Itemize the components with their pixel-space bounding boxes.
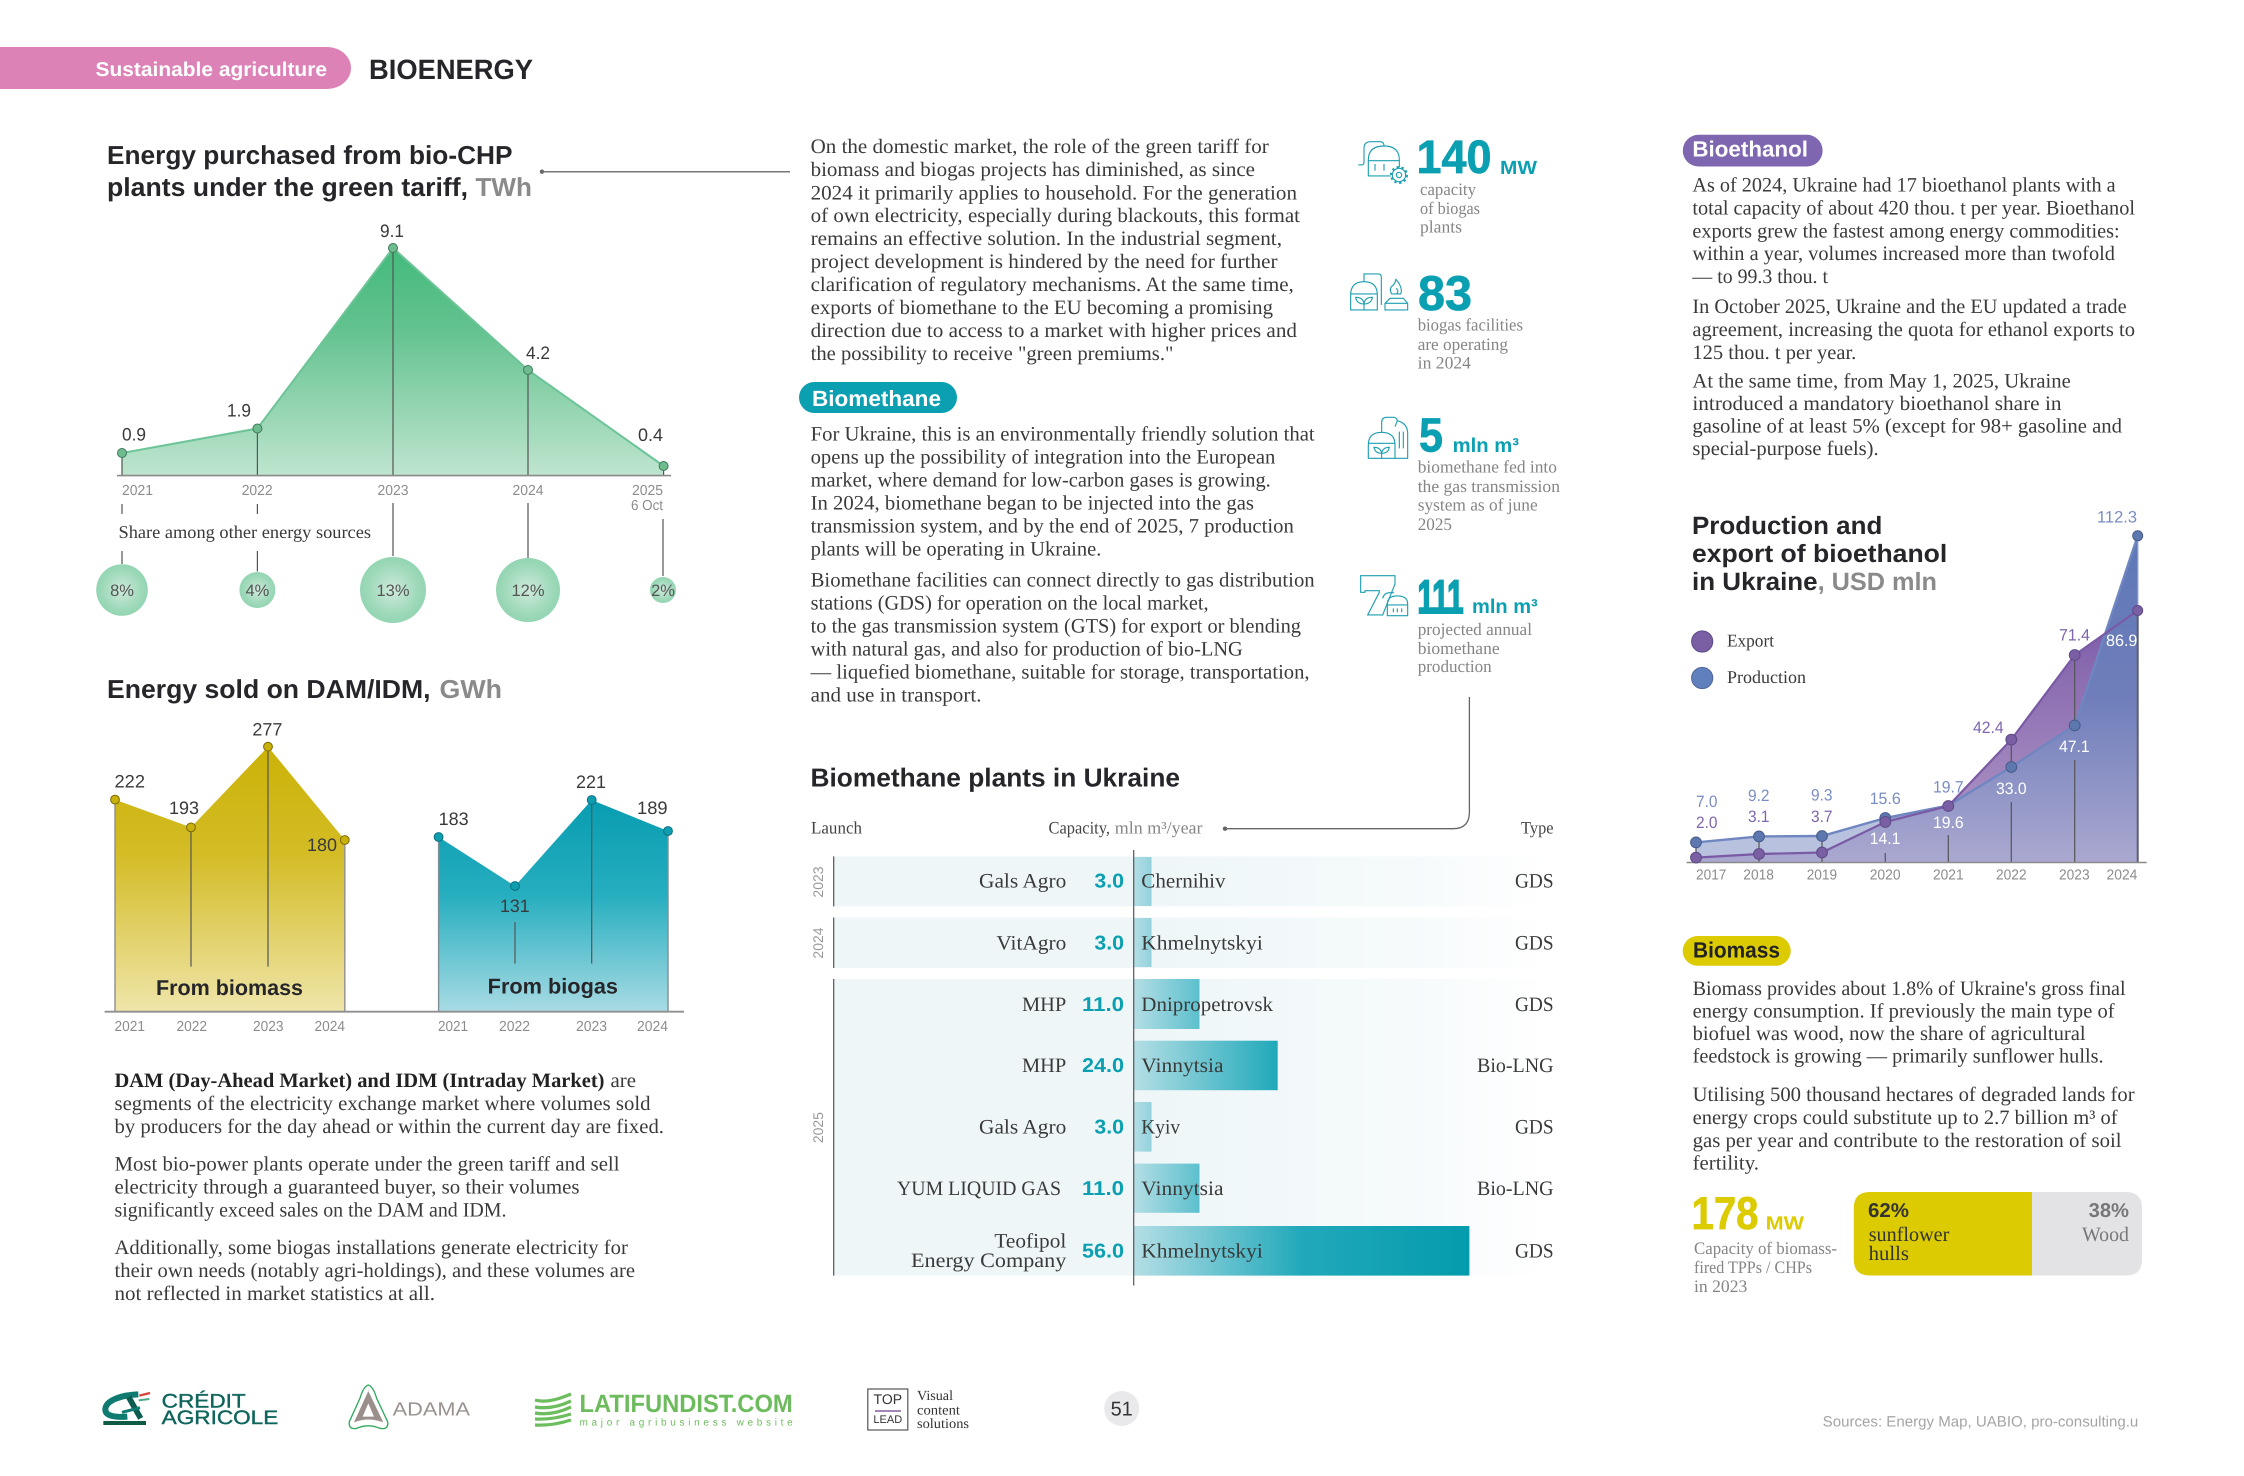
area chart: from biogas: 2022 (499, 1019, 530, 1035)
row: Gals Agro 3.0 Chernihiv: Chernihiv (1141, 871, 1226, 893)
header: section tab: Sustainable agriculture (96, 59, 327, 81)
row: Teofipol Energy Company 56.0 Khmelnytskyi: 56.0 (1082, 1240, 1124, 1262)
row: Gals Agro 3.0 Chernihiv: 3.0 (1094, 871, 1124, 893)
row: VitAgro 3.0 Khmelnytskyi: GDS (1515, 933, 1554, 955)
stat: 111 mln m3 projected production (1361, 570, 1538, 676)
text block: DAM and IDM explanation: their own needs (notably agri-holdings), and these volumes are (114, 1260, 635, 1282)
area chart: from biomass: 2023 (253, 1019, 284, 1035)
area chart: from biomass: 277 (252, 720, 282, 740)
table header: mln m³/year (1115, 818, 1203, 838)
panel: energy sold on DAM/IDM (105, 674, 684, 1035)
area chart: TWh by year: 0.9 (122, 425, 146, 445)
text block: biomethane: plants will be operating in Ukraine. (811, 538, 1101, 560)
text block: biomethane: Biomethane facilities can connect directly to gas distribution (811, 570, 1315, 592)
text block: bioethanol: introduced a mandatory bioethanol share in (1692, 393, 2062, 415)
text block: bioethanol: gasoline of at least 5% (except for 98+ gasoline and (1692, 416, 2122, 438)
row: MHP 24.0 Vinnytsia: MHP (1022, 1055, 1066, 1077)
row: Gals Agro 3.0 Kyiv: Kyiv (1141, 1116, 1181, 1138)
area chart: from biogas: From biogas (488, 974, 618, 998)
text block: bioethanol: At the same time, from May 1, 2025, Ukraine (1692, 370, 2071, 392)
text block: biomass (1693, 978, 2135, 1174)
stat: 111 mln m3 projected production: biomethane (1418, 638, 1500, 658)
area chart: TWh by year: 2023 (378, 483, 408, 499)
icon: tank and silo (1368, 417, 1408, 458)
header: section tab (0, 47, 351, 89)
area chart: TWh by year: 1.9 (227, 401, 251, 421)
area chart: from biomass: From biomass (156, 976, 303, 1000)
bubbles: share among other energy sources (96, 503, 676, 623)
logo: Top Lead: LEAD (873, 1414, 902, 1426)
area chart: TWh by year: 9.1 (380, 221, 404, 241)
area chart: from biogas: 2021 (438, 1019, 468, 1035)
text block: biomass: energy crops could substitute up to 2.7 billion m³ of (1693, 1107, 2118, 1129)
header: page title: BIOENERGY (369, 54, 533, 85)
page number: 51 (1111, 1398, 1133, 1420)
logo: Top Lead: TOP (874, 1391, 902, 1407)
page number (1104, 1391, 1139, 1426)
area chart: bioethanol: 42.4 (1973, 719, 2004, 737)
text block: DAM and IDM explanation: not reflected in market statistics at all. (114, 1283, 435, 1305)
text block: biomethane (810, 423, 1315, 707)
area chart: TWh by year: 2024 (512, 483, 544, 499)
launch year labels: 2023 (810, 866, 826, 898)
row: VitAgro 3.0 Khmelnytskyi: 3.0 (1094, 933, 1124, 955)
legend: Export (1727, 630, 1774, 650)
logo: Credit Agricole (103, 1391, 278, 1429)
row: YUM LIQUID GAS 11.0 Vinnytsia: Vinnytsia (1141, 1178, 1224, 1200)
stat: 83 biogas facilities: are operating (1418, 334, 1508, 354)
area chart: TWh by year: 2022 (242, 483, 273, 499)
stacked bar: sunflower hulls vs wood: 62% (1868, 1200, 1909, 1222)
stat: 140 MW capacity of biogas plants: 140 (1416, 130, 1492, 183)
area chart: bioethanol: 33.0 (1996, 780, 2027, 798)
row: MHP 24.0 Vinnytsia: Vinnytsia (1141, 1055, 1224, 1077)
area chart: bioethanol: 7.0 (1696, 793, 1718, 811)
row: YUM LIQUID GAS 11.0 Vinnytsia: Bio-LNG (1477, 1178, 1554, 1200)
area chart: TWh by year: 6 Oct (631, 498, 663, 514)
tag: Bioethanol: Bioethanol (1692, 136, 1808, 162)
area chart: bioethanol: 3.1 (1748, 808, 1770, 826)
text block: bioethanol: exports grew the fastest among energy commodities: (1692, 220, 2120, 242)
icon: tank with leaf and flame (1351, 274, 1408, 310)
logo: Top Lead: content (917, 1404, 960, 1418)
area chart: from biomass: 2024 (314, 1019, 345, 1035)
row: VitAgro 3.0 Khmelnytskyi: Khmelnytskyi (1141, 933, 1263, 955)
stat: 111 mln m3 projected production: 111 (1418, 570, 1464, 623)
text block: domestic market (811, 136, 1300, 365)
text block: DAM and IDM explanation: by producers for the day ahead or within the current day are fixed. (114, 1116, 664, 1138)
text block: bioethanol: total capacity of about 420 thou. t per year. Bioethanol (1692, 197, 2135, 219)
heading: energy purchased: TWh (476, 172, 532, 202)
area chart: from biogas: 221 (576, 772, 606, 792)
table header: Launch (811, 818, 862, 838)
text block: biomethane: For Ukraine, this is an environmentally friendly solution that (811, 423, 1315, 445)
stat: 178 MW biomass capacity: 178 (1692, 1187, 1758, 1239)
row: Gals Agro 3.0 Kyiv (979, 1116, 1554, 1138)
text block: DAM and IDM explanation: Most bio-power plants operate under the green tariff and sell (114, 1153, 620, 1175)
area chart: bioethanol: 2.0 (1696, 814, 1718, 832)
text block: biomethane: market, where demand for low-carbon gases is growing. (811, 469, 1271, 491)
row: Gals Agro 3.0 Chernihiv: Gals Agro (979, 871, 1066, 893)
text block: domestic market: On the domestic market, the role of the green tariff for (811, 136, 1269, 158)
area chart: bioethanol: 9.2 (1748, 787, 1770, 805)
icon: number seven with tank (1361, 576, 1408, 616)
row: MHP 24.0 Vinnytsia: 24.0 (1082, 1055, 1124, 1077)
tag: Bioethanol (1683, 135, 1823, 166)
row: MHP 11.0 Dnipropetrovsk: MHP (1022, 994, 1066, 1016)
stat: 178 MW biomass capacity: MW (1766, 1214, 1804, 1234)
area chart: bioethanol: 14.1 (1870, 830, 1900, 848)
sources: Sources: Energy Map, UABIO, pro-consulting.u (1823, 1414, 2138, 1431)
launch year labels (810, 866, 826, 1143)
text block: biomass: feedstock is growing — primarily sunflower hulls. (1693, 1046, 2104, 1068)
row: Gals Agro 3.0 Chernihiv: GDS (1515, 871, 1554, 893)
text block: domestic market: direction due to access to a market with higher prices and (811, 320, 1297, 342)
stat: 5 mln m3 biomethane: 2025 (1418, 514, 1452, 534)
text block: DAM and IDM explanation (114, 1070, 664, 1305)
text block: biomethane: stations (GDS) for operation on the local market, (811, 593, 1209, 615)
text block: biomethane: — liquefied biomethane, suitable for storage, transportation, (810, 662, 1310, 684)
text block: domestic market: of own electricity, especially during blackouts, this format (811, 205, 1300, 227)
stat: 111 mln m3 projected production: mln m³ (1472, 596, 1538, 618)
logo: Adama: ADAMA (393, 1400, 470, 1421)
text block: domestic market: clarification of regulatory mechanisms. At the same time, (811, 274, 1294, 296)
text block: domestic market: exports of biomethane to the EU becoming a promising (811, 297, 1273, 319)
stacked bar: sunflower hulls vs wood: Wood (2082, 1224, 2129, 1246)
stacked bar: sunflower hulls vs wood: 38% (2089, 1200, 2129, 1222)
text block: biomass: energy consumption. If previously the main type of (1693, 1001, 2115, 1023)
row: MHP 11.0 Dnipropetrovsk (1022, 994, 1554, 1016)
row: VitAgro 3.0 Khmelnytskyi (996, 933, 1554, 955)
text block: biomass: gas per year and contribute to the restoration of soil (1693, 1130, 2122, 1152)
text block: biomethane: In 2024, biomethane began to be injected into the gas (811, 492, 1254, 514)
area chart: from biogas: 183 (439, 809, 469, 829)
text block: DAM and IDM explanation: significantly exceed sales on the DAM and IDM. (114, 1199, 506, 1221)
text block: domestic market: biomass and biogas projects has diminished, as since (811, 159, 1255, 181)
area chart: bioethanol: 2021 (1933, 868, 1964, 884)
area chart: bioethanol: 2020 (1870, 868, 1901, 884)
area chart: bioethanol: 2019 (1807, 868, 1837, 884)
row: VitAgro 3.0 Khmelnytskyi: VitAgro (996, 933, 1066, 955)
heading: energy purchased (107, 140, 532, 202)
area chart: from biomass: 2022 (176, 1019, 207, 1035)
text block: biomass: Utilising 500 thousand hectares of degraded lands for (1693, 1084, 2135, 1106)
stat: 111 mln m3 projected production: production (1418, 656, 1492, 676)
launch year labels: 2024 (810, 927, 826, 959)
text block: bioethanol: As of 2024, Ukraine had 17 bioethanol plants with a (1692, 174, 2116, 196)
stat: 140 MW capacity of biogas plants: MW (1500, 158, 1537, 179)
stat: 83 biogas facilities (1351, 267, 1523, 373)
heading: energy sold: Energy sold on DAM/IDM, (107, 674, 430, 704)
stat: 178 MW biomass capacity: Capacity of biomass- (1694, 1238, 1837, 1258)
area chart: bioethanol: 71.4 (2059, 626, 2090, 644)
area chart: from biomass: 193 (169, 798, 199, 818)
stat: 178 MW biomass capacity: fired TPPs / CHPs (1694, 1257, 1812, 1277)
stat: 140 MW capacity of biogas plants: capacity (1420, 179, 1476, 199)
text block: domestic market: 2024 it primarily applies to household. For the generation (811, 182, 1297, 204)
row: MHP 11.0 Dnipropetrovsk: GDS (1515, 994, 1554, 1016)
row: Gals Agro 3.0 Kyiv: GDS (1515, 1116, 1554, 1138)
logo: Top Lead (868, 1389, 969, 1432)
text block: domestic market: the possibility to receive "green premiums." (811, 343, 1173, 365)
logo: Top Lead: solutions (917, 1417, 969, 1432)
text block: biomethane: and use in transport. (811, 685, 981, 707)
text block: biomethane: to the gas transmission system (GTS) for export or blending (811, 616, 1301, 638)
area chart: from biomass: 222 (114, 772, 145, 792)
text block: bioethanol (1691, 174, 2135, 460)
bubbles: share among other energy sources: Share among other energy sources (118, 522, 371, 542)
text block: domestic market: project development is hindered by the need for further (811, 251, 1278, 273)
stat: 5 mln m3 biomethane: mln m³ (1453, 435, 1519, 457)
row: Teofipol Energy Company 56.0 Khmelnytskyi: Teofipol (994, 1231, 1067, 1253)
stat: 5 mln m3 biomethane: system as of june (1418, 495, 1538, 515)
row backgrounds (834, 856, 1550, 1276)
capacity bars (1134, 850, 1469, 1286)
area chart: from biomass (111, 720, 349, 1035)
text block: biomethane: with natural gas, and also for production of bio-LNG (811, 639, 1243, 661)
stat: 111 mln m3 projected production: projected annual (1418, 619, 1532, 639)
heading: biomethane plants: Biomethane plants in Ukraine (810, 762, 1180, 792)
legend (1692, 630, 1806, 689)
bubbles: share among other energy sources: 4% (245, 582, 270, 600)
row: MHP 24.0 Vinnytsia: Bio-LNG (1477, 1055, 1554, 1077)
row: YUM LIQUID GAS 11.0 Vinnytsia: 11.0 (1082, 1178, 1124, 1200)
logo: Latifundist: major agribusiness website (580, 1418, 793, 1429)
tag: Biomass: Biomass (1693, 938, 1780, 962)
heading: production and export: Production and (1692, 512, 1882, 540)
area chart: bioethanol: 2023 (2059, 868, 2090, 884)
logo: Latifundist (535, 1390, 793, 1429)
text block: DAM and IDM explanation: segments of the electricity exchange market where volumes sold (114, 1093, 650, 1115)
logo: Latifundist: LATIFUNDIST.COM (580, 1390, 793, 1418)
heading: production and export: in Ukraine (1692, 568, 1818, 596)
stat: 178 MW biomass capacity: in 2023 (1694, 1276, 1748, 1296)
bubbles: share among other energy sources: 2% (651, 582, 675, 600)
area chart: bioethanol: 2017 (1696, 868, 1726, 884)
row: MHP 11.0 Dnipropetrovsk: 11.0 (1082, 994, 1124, 1016)
area chart: bioethanol (1687, 509, 2147, 884)
logo: Credit Agricole: CRÉDIT (162, 1391, 246, 1413)
area chart: bioethanol: 3.7 (1811, 808, 1832, 826)
connector line from stats to capacity header (1223, 697, 1469, 831)
stat: 5 mln m3 biomethane: biomethane fed into (1418, 457, 1557, 477)
launch year labels: 2025 (810, 1112, 826, 1143)
stacked bar: sunflower hulls vs wood: hulls (1869, 1243, 1909, 1265)
tag: Biomethane (799, 382, 957, 413)
panel: production and export of bioethanol (1687, 509, 2147, 884)
area chart: bioethanol: 112.3 (2097, 509, 2137, 527)
logo: Adama (349, 1385, 470, 1429)
area chart: from biogas: 189 (637, 798, 668, 818)
stat: 83 biogas facilities: in 2024 (1418, 353, 1471, 373)
stacked bar: sunflower hulls vs wood: sunflower (1869, 1224, 1949, 1246)
text block: domestic market: remains an effective solution. In the industrial segment, (811, 228, 1282, 250)
stat: 178 MW biomass capacity (1692, 1187, 1837, 1296)
text block: DAM and IDM explanation: are (610, 1070, 636, 1092)
stat: 5 mln m3 biomethane: the gas transmission (1418, 476, 1560, 496)
area chart: from biogas (434, 772, 672, 1035)
text block: DAM and IDM explanation: Additionally, some biogas installations generate electricity for (114, 1237, 628, 1259)
text block: biomass: Biomass provides about 1.8% of Ukraine's gross final (1693, 978, 2126, 1000)
table header (811, 818, 1554, 838)
table header: Capacity, (1048, 818, 1110, 838)
stat: 83 biogas facilities: 83 (1418, 267, 1472, 321)
text block: bioethanol: special-purpose fuels). (1692, 438, 1879, 460)
text block: biomass: biofuel was wood, now the share of agricultural (1693, 1023, 2086, 1045)
stat: 140 MW capacity of biogas plants (1358, 130, 1537, 237)
row: Gals Agro 3.0 Chernihiv (979, 871, 1554, 893)
stat: 140 MW capacity of biogas plants: of biogas (1420, 198, 1480, 218)
text block: biomethane: transmission system, and by the end of 2025, 7 production (811, 515, 1294, 537)
text block: bioethanol: agreement, increasing the quota for ethanol exports to (1692, 319, 2135, 341)
area chart: TWh by year: 2021 (122, 483, 153, 499)
area chart: TWh by year: 0.4 (638, 425, 663, 445)
stat: 5 mln m3 biomethane: 5 (1419, 410, 1443, 463)
text block: biomethane: opens up the possibility of integration into the European (811, 446, 1275, 468)
area chart: from biomass: 180 (307, 835, 337, 855)
logo: Credit Agricole: AGRICOLE (162, 1407, 278, 1429)
area chart: TWh by year: 2025 (632, 483, 663, 499)
row: Teofipol Energy Company 56.0 Khmelnytskyi: GDS (1515, 1240, 1554, 1262)
row: Teofipol Energy Company 56.0 Khmelnytskyi: Khmelnytskyi (1141, 1240, 1263, 1262)
stat: 5 mln m3 biomethane (1368, 410, 1560, 534)
row: Teofipol Energy Company 56.0 Khmelnytskyi (911, 1231, 1554, 1272)
heading: energy sold: GWh (440, 674, 502, 704)
panel: biomethane plants table (810, 697, 1554, 1286)
area chart: from biomass: 2021 (114, 1019, 145, 1035)
area chart: bioethanol: 86.9 (2106, 632, 2137, 650)
row: YUM LIQUID GAS 11.0 Vinnytsia (897, 1178, 1554, 1200)
heading: production and export: export of bioethanol (1692, 540, 1947, 568)
area chart: bioethanol: 2022 (1996, 868, 2027, 884)
stacked bar: sunflower hulls vs wood (1854, 1192, 2142, 1276)
text block: DAM and IDM explanation: DAM (Day-Ahead Market) and IDM (Intraday Market) (114, 1070, 604, 1092)
area chart: bioethanol: 19.7 (1933, 778, 1964, 796)
area chart: bioethanol: 9.3 (1811, 786, 1832, 804)
heading: production and export: , USD mln (1818, 568, 1937, 596)
bubbles: share among other energy sources: 13% (376, 582, 410, 600)
area chart: bioethanol: 2024 (2106, 868, 2137, 884)
row: MHP 24.0 Vinnytsia (1022, 1055, 1554, 1077)
area chart: from biogas: 2024 (637, 1019, 668, 1035)
area chart: TWh by year (117, 221, 671, 514)
bubbles: share among other energy sources: 12% (511, 582, 545, 600)
stat: 83 biogas facilities: biogas facilities (1418, 315, 1523, 335)
text block: DAM and IDM explanation: electricity through a guaranteed buyer, so their volumes (114, 1176, 580, 1198)
row: Teofipol Energy Company 56.0 Khmelnytskyi: Energy Company (911, 1250, 1067, 1272)
row: YUM LIQUID GAS 11.0 Vinnytsia: YUM LIQUID GAS (897, 1178, 1061, 1200)
logo: Top Lead: Visual (917, 1389, 953, 1404)
row: MHP 11.0 Dnipropetrovsk: Dnipropetrovsk (1141, 994, 1274, 1016)
heading: energy purchased: Energy purchased from bio-CHP (107, 140, 512, 170)
stat: 140 MW capacity of biogas plants: plants (1420, 217, 1462, 237)
text block: bioethanol: In October 2025, Ukraine and the EU updated a trade (1692, 296, 2127, 318)
area chart: bioethanol: 19.6 (1933, 814, 1964, 832)
legend: Production (1727, 667, 1806, 687)
text block: bioethanol: 125 thou. t per year. (1692, 342, 1856, 364)
panel: energy purchased under the green tariff (96, 140, 790, 623)
area chart: from biogas: 131 (500, 896, 530, 916)
text block: biomass: fertility. (1693, 1152, 1759, 1174)
row: Gals Agro 3.0 Kyiv: Gals Agro (979, 1116, 1066, 1138)
bubbles: share among other energy sources: 8% (110, 582, 134, 600)
text block: bioethanol: — to 99.3 thou. t (1691, 266, 1828, 288)
row: Gals Agro 3.0 Kyiv: 3.0 (1094, 1116, 1124, 1138)
area chart: from biogas: 2023 (576, 1019, 607, 1035)
table header: Type (1521, 818, 1554, 838)
heading: energy purchased: plants under the green tariff, (107, 172, 468, 202)
icon: biogas tank with gear (1358, 142, 1407, 183)
heading: production and export (1692, 512, 1947, 596)
area chart: bioethanol: 15.6 (1870, 790, 1901, 808)
text block: bioethanol: within a year, volumes increased more than twofold (1692, 243, 2115, 265)
tag: Biomethane: Biomethane (812, 386, 941, 411)
area chart: bioethanol: 2018 (1743, 868, 1774, 884)
area chart: TWh by year: 4.2 (526, 343, 550, 363)
area chart: bioethanol: 47.1 (2059, 738, 2090, 756)
connector line to text (540, 170, 790, 174)
